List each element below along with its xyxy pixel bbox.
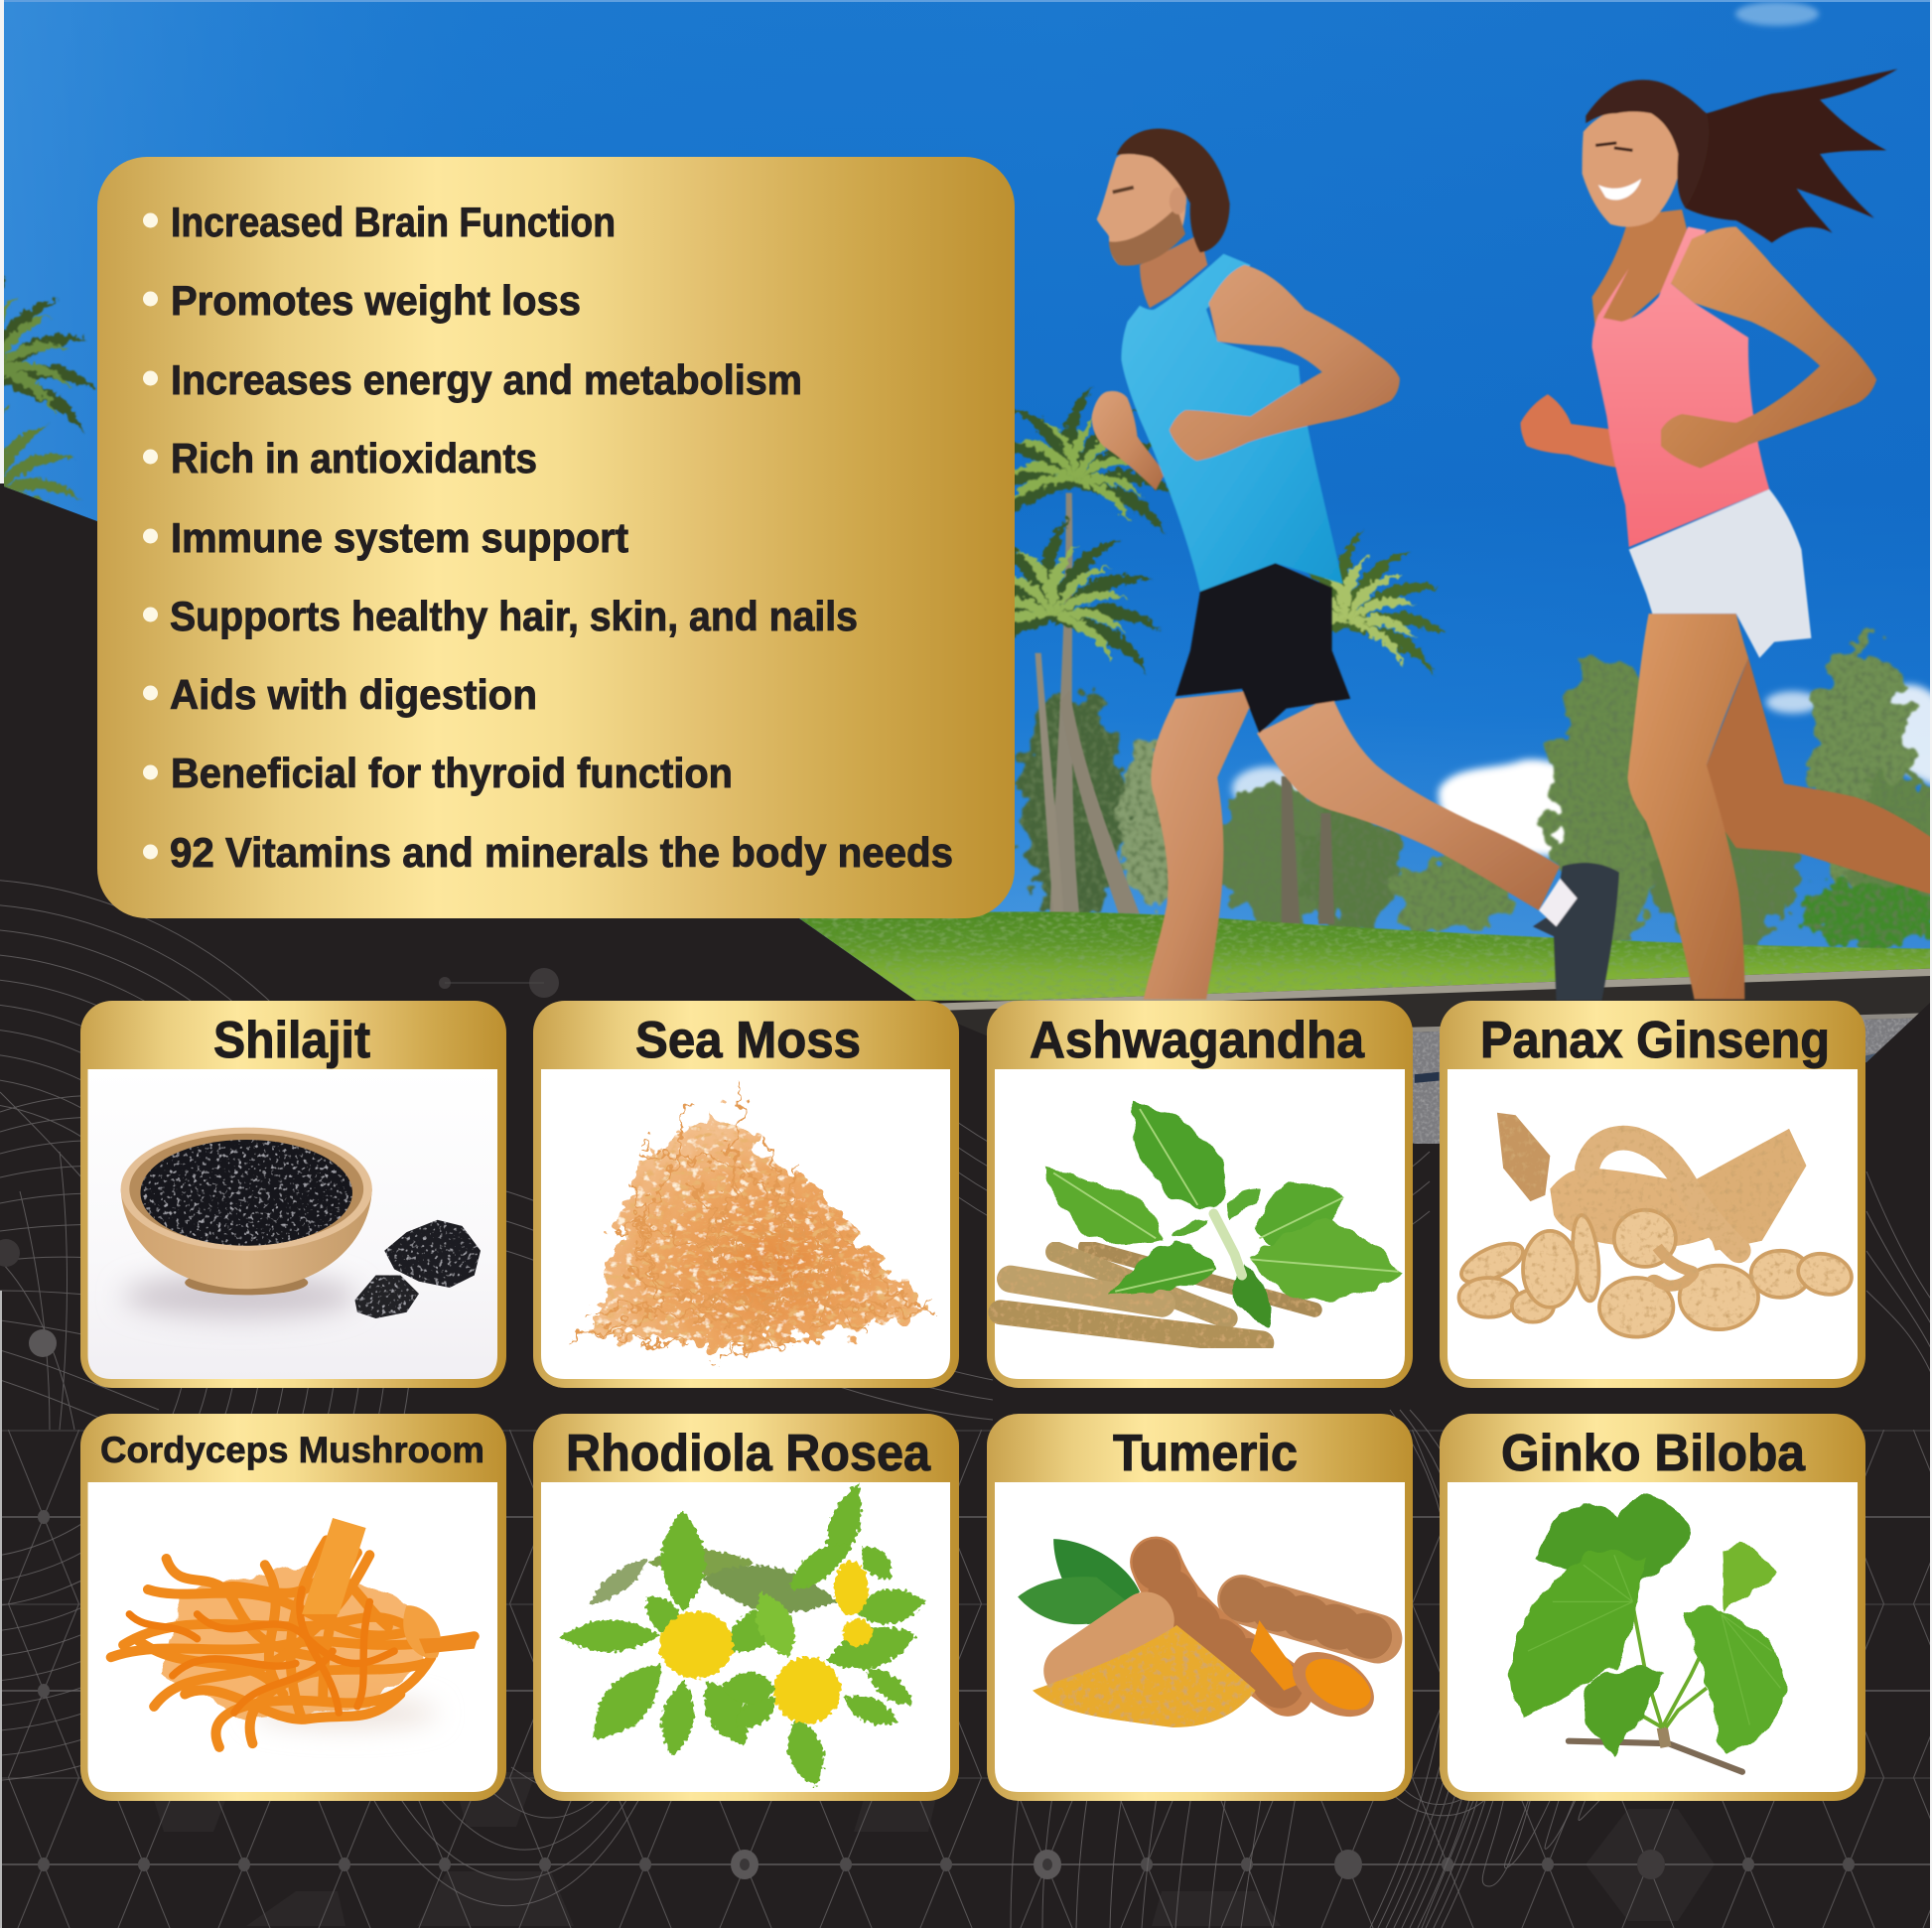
man hair [1116, 129, 1230, 252]
title: Ashwagandha: Ashwagandha [1030, 1012, 1365, 1069]
card: Ginko Biloba [1440, 1414, 1865, 1801]
benefit texts [170, 199, 953, 876]
woman front leg [1627, 614, 1748, 1000]
title: Shilajit: Shilajit [213, 1012, 370, 1069]
man neck and head [1140, 234, 1207, 308]
woman rear leg [1707, 658, 1932, 895]
man front leg [1144, 690, 1257, 1000]
card: Panax Ginseng [1440, 1001, 1865, 1388]
palm trees [0, 274, 1448, 924]
woman neck and shoulders [1592, 209, 1688, 333]
title: Tumeric: Tumeric [1113, 1425, 1298, 1482]
woman near arm [1661, 226, 1876, 469]
benefit texts: Beneficial for thyroid function [171, 750, 733, 796]
card: Sea Moss [533, 1001, 959, 1388]
grass [788, 911, 1932, 1001]
card: Tumeric [987, 1414, 1413, 1801]
distant trees [1021, 640, 1932, 949]
title: Ginko Biloba: Ginko Biloba [1501, 1425, 1806, 1482]
benefit texts: Increases energy and metabolism [171, 356, 802, 403]
title: Rhodiola Rosea: Rhodiola Rosea [566, 1425, 931, 1482]
woman pink top [1592, 226, 1769, 547]
image: sea moss tangle [573, 1082, 936, 1360]
benefit texts: Rich in antioxidants [171, 435, 537, 482]
sky [0, 0, 1932, 993]
man far arm [1092, 391, 1165, 490]
kerb and road [939, 969, 1930, 1144]
card: Ashwagandha [987, 1001, 1413, 1388]
clouds [1232, 685, 1932, 863]
image: ginseng root and slices [1455, 1113, 1857, 1337]
image: bowl of shilajit [121, 1128, 481, 1318]
woman jogging [1521, 69, 1932, 1000]
image: ashwagandha root and leaves [1001, 1100, 1404, 1343]
man shorts [1175, 563, 1350, 733]
woman head [1583, 106, 1682, 227]
benefit texts: 92 Vitamins and minerals the body needs [170, 829, 953, 876]
benefit texts: Promotes weight loss [171, 277, 581, 324]
woman ponytail [1680, 69, 1897, 242]
man rear leg [1257, 696, 1560, 910]
title: Cordyceps Mushroom: Cordyceps Mushroom [100, 1430, 484, 1470]
benefit texts: Supports healthy hair, skin, and nails [170, 593, 858, 639]
card: Cordyceps Mushroom [80, 1414, 506, 1801]
card: Shilajit [80, 1001, 506, 1388]
woman far arm [1521, 394, 1621, 469]
photo: couple jogging under a blue sky [0, 0, 1932, 1159]
benefit texts: Aids with digestion [170, 671, 537, 718]
man near arm [1170, 265, 1400, 461]
image: cordyceps [111, 1518, 479, 1747]
man shoe [1533, 863, 1619, 1001]
image: ginkgo leaves [1512, 1496, 1784, 1772]
bullets [143, 212, 158, 860]
title: Panax Ginseng: Panax Ginseng [1480, 1012, 1830, 1069]
woman shorts [1629, 489, 1811, 658]
title: Sea Moss: Sea Moss [635, 1012, 861, 1069]
dark background with network pattern [0, 483, 1930, 1928]
benefit texts: Increased Brain Function [171, 199, 616, 245]
image: rhodiola rosea plant [559, 1478, 928, 1791]
card: Rhodiola Rosea [533, 1414, 959, 1801]
woman hair [1586, 79, 1709, 208]
image: turmeric roots and powder [1018, 1539, 1385, 1730]
panel: benefits list [97, 157, 1015, 918]
benefit texts: Immune system support [171, 514, 628, 561]
man jogging [1092, 129, 1619, 1001]
man shirt [1121, 254, 1343, 592]
